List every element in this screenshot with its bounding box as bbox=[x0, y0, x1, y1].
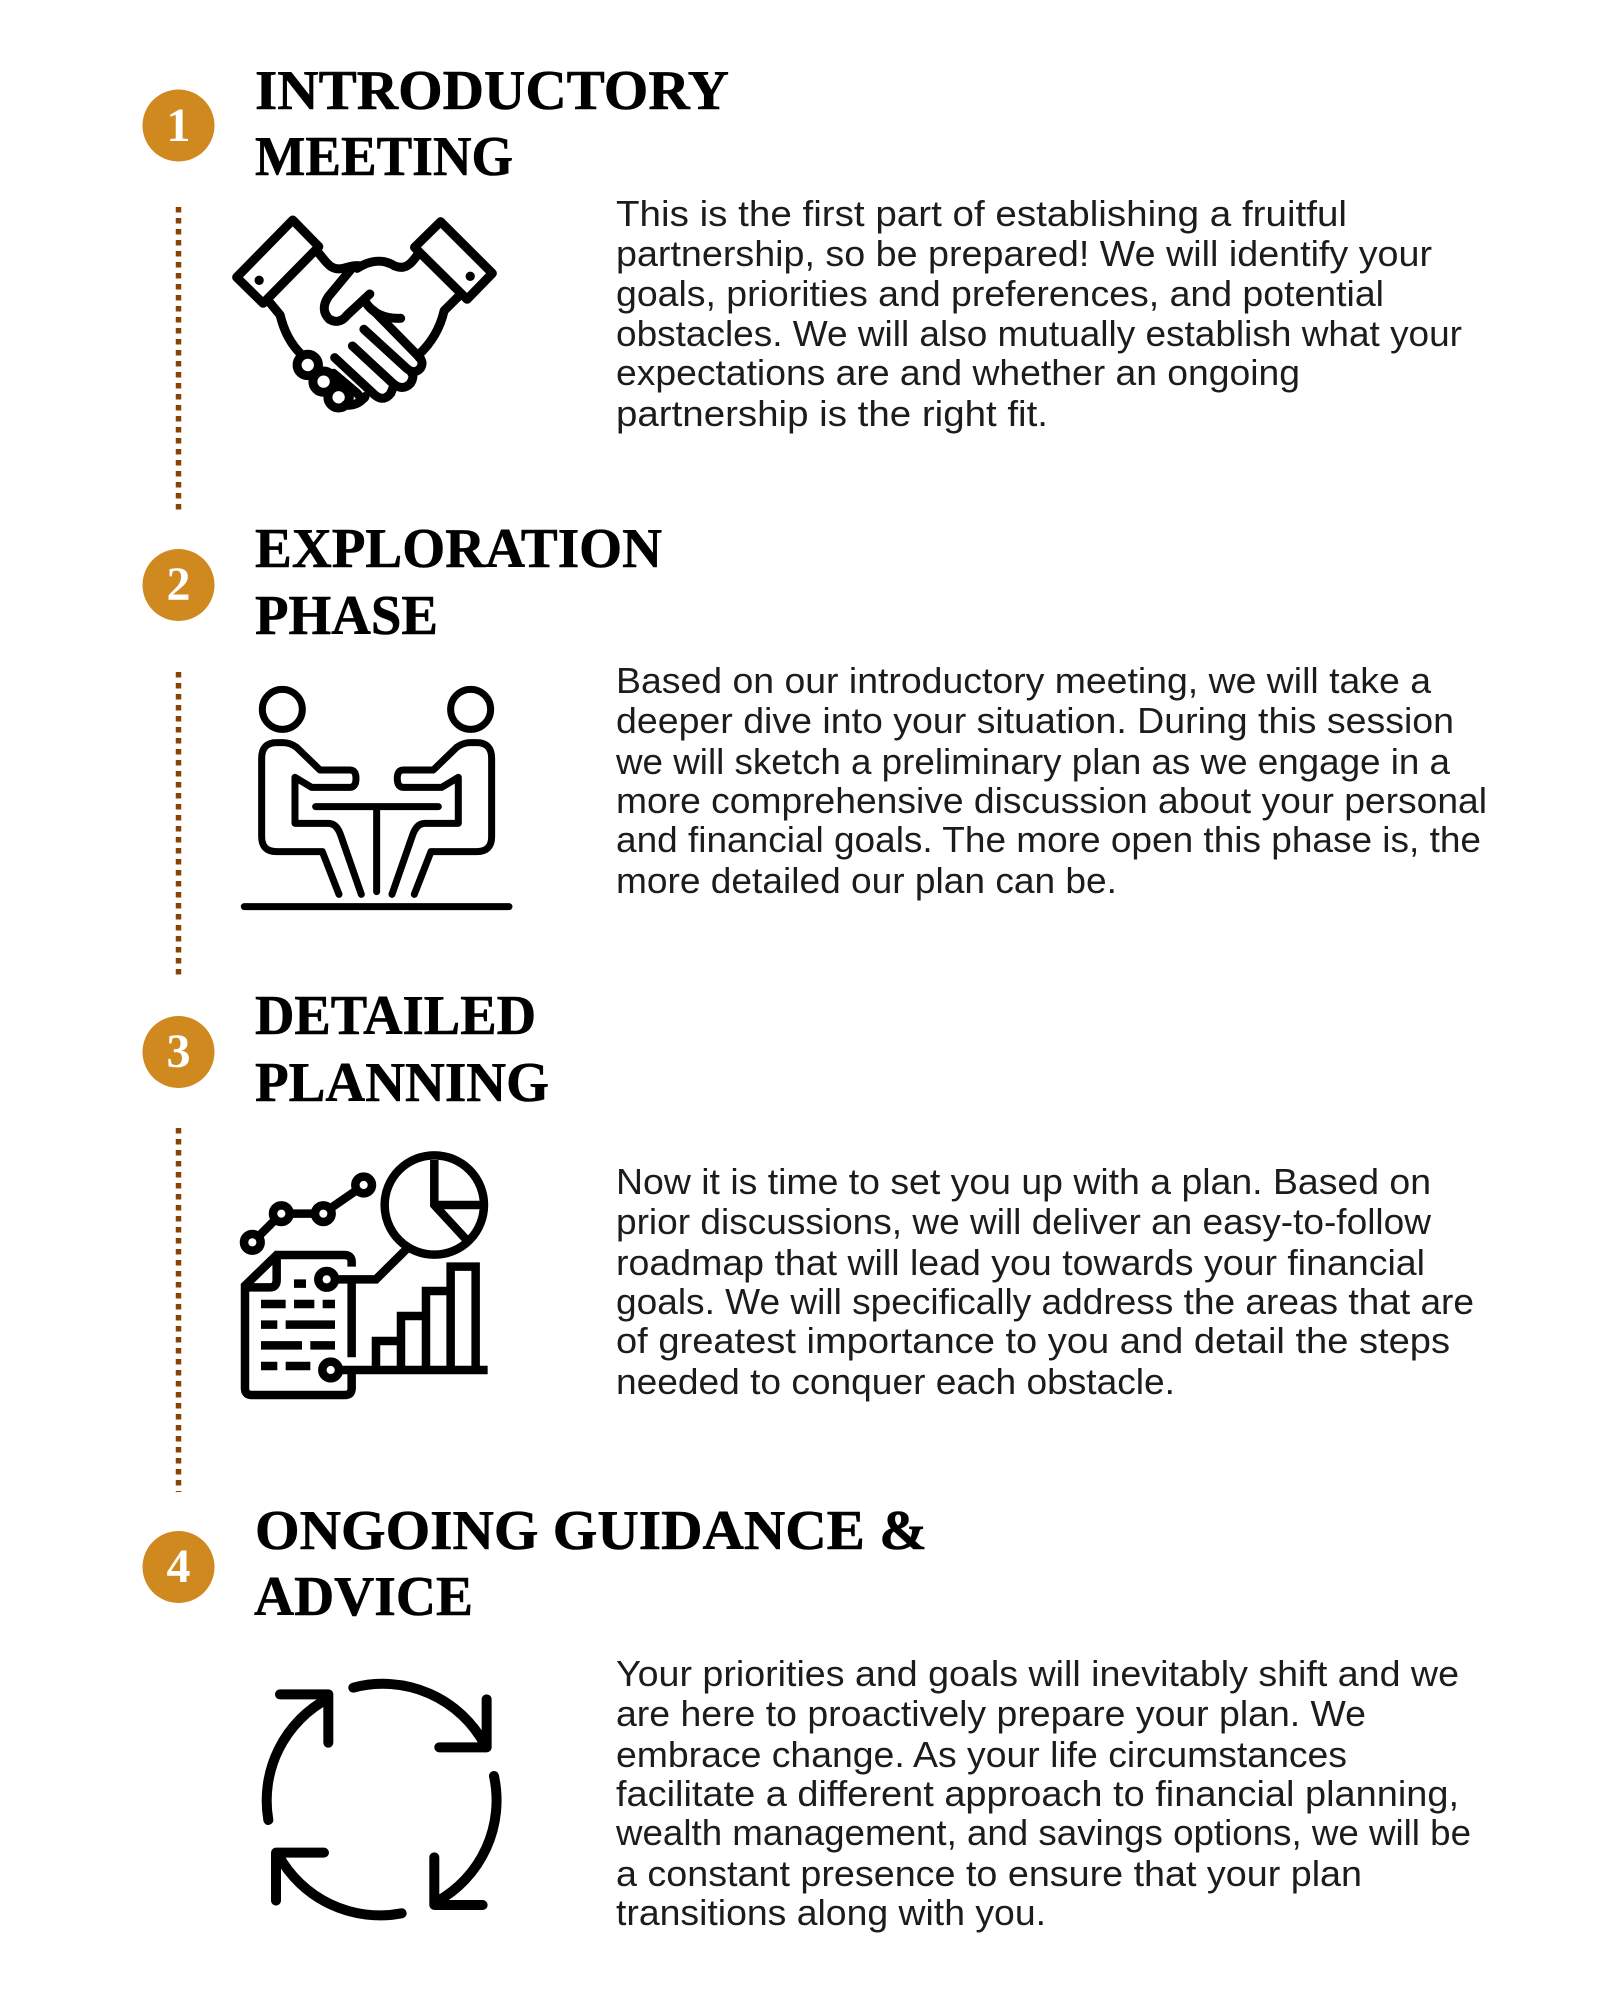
heading: ongoing guidance and advice: ONGOING GUIDANCE & bbox=[255, 1500, 927, 1562]
text block 1 bbox=[616, 193, 1462, 434]
heading: introductory meeting: INTRODUCTORY bbox=[255, 60, 729, 122]
dotted connector 3 bbox=[176, 1128, 181, 1492]
text block 3: prior discussions, we will deliver an easy-to-follow bbox=[616, 1201, 1432, 1242]
text block 4: embrace change. As your life circumstances bbox=[616, 1734, 1347, 1775]
text block 2: more comprehensive discussion about your personal bbox=[616, 780, 1487, 821]
dotted connector 1 bbox=[176, 207, 181, 510]
heading: ongoing guidance and advice: ADVICE bbox=[254, 1566, 473, 1628]
text block 2 bbox=[615, 660, 1487, 901]
text block 4: a constant presence to ensure that your plan bbox=[616, 1853, 1362, 1894]
heading: detailed planning: PLANNING bbox=[255, 1052, 549, 1114]
text block 4: Your priorities and goals will inevitably shift and we bbox=[616, 1653, 1459, 1694]
heading: detailed planning: DETAILED bbox=[255, 985, 536, 1047]
heading: introductory meeting bbox=[255, 60, 729, 188]
icon: handshake bbox=[237, 220, 492, 408]
heading: exploration phase: PHASE bbox=[255, 585, 438, 647]
number badge 1 bbox=[142, 90, 214, 162]
text block 3: Now it is time to set you up with a plan. Based on bbox=[616, 1161, 1431, 1202]
panel: step 2 exploration phase bbox=[142, 518, 1487, 975]
text block 2: more detailed our plan can be. bbox=[616, 860, 1117, 901]
text block 4: facilitate a different approach to financial planning, bbox=[616, 1773, 1459, 1814]
panel: step 4 ongoing guidance and advice bbox=[142, 1500, 1471, 1933]
number badge 3 bbox=[142, 1016, 214, 1088]
text block 4 bbox=[615, 1653, 1471, 1933]
text block 1: This is the first part of establishing a fruitful bbox=[616, 193, 1347, 234]
dotted connector 2 bbox=[176, 672, 181, 975]
icon: document, charts and pie bbox=[244, 1155, 488, 1395]
icon: circular arrows bbox=[267, 1684, 497, 1915]
heading: exploration phase bbox=[255, 518, 662, 647]
text block 1: obstacles. We will also mutually establish what your bbox=[616, 313, 1462, 354]
icon: two people at a table bbox=[244, 689, 509, 907]
text block 4: transitions along with you. bbox=[616, 1892, 1046, 1933]
text block 1: partnership, so be prepared! We will identify your bbox=[616, 233, 1432, 274]
text block 3: roadmap that will lead you towards your financial bbox=[616, 1242, 1425, 1283]
text block 3: needed to conquer each obstacle. bbox=[616, 1361, 1175, 1402]
text block 2: and financial goals. The more open this phase is, the bbox=[616, 819, 1481, 860]
text block 3 bbox=[616, 1161, 1474, 1402]
text block 3: of greatest importance to you and detail the steps bbox=[616, 1320, 1450, 1361]
text block 1: partnership is the right fit. bbox=[616, 393, 1048, 434]
number badge 4 bbox=[142, 1531, 214, 1603]
panel: step 1 introductory meeting bbox=[142, 60, 1462, 510]
number badge 4: 4 bbox=[166, 1540, 190, 1593]
text block 1: goals, priorities and preferences, and potential bbox=[616, 273, 1384, 314]
heading: introductory meeting: MEETING bbox=[255, 126, 513, 188]
number badge 2: 2 bbox=[166, 558, 190, 611]
text block 4: wealth management, and savings options, we will be bbox=[615, 1812, 1471, 1853]
number badge 2 bbox=[142, 549, 214, 621]
text block 2: Based on our introductory meeting, we will take a bbox=[616, 660, 1432, 701]
heading: ongoing guidance and advice bbox=[254, 1500, 927, 1628]
heading: detailed planning bbox=[255, 985, 549, 1114]
text block 2: deeper dive into your situation. During this session bbox=[616, 700, 1454, 741]
number badge 1: 1 bbox=[166, 99, 190, 152]
text block 4: are here to proactively prepare your plan. We bbox=[616, 1693, 1366, 1734]
text block 3: goals. We will specifically address the areas that are bbox=[616, 1281, 1474, 1322]
number badge 3: 3 bbox=[166, 1025, 190, 1078]
heading: exploration phase: EXPLORATION bbox=[255, 518, 662, 580]
panel: step 3 detailed planning bbox=[142, 985, 1474, 1492]
text block 2: we will sketch a preliminary plan as we engage in a bbox=[615, 741, 1451, 782]
text block 1: expectations are and whether an ongoing bbox=[616, 352, 1300, 393]
